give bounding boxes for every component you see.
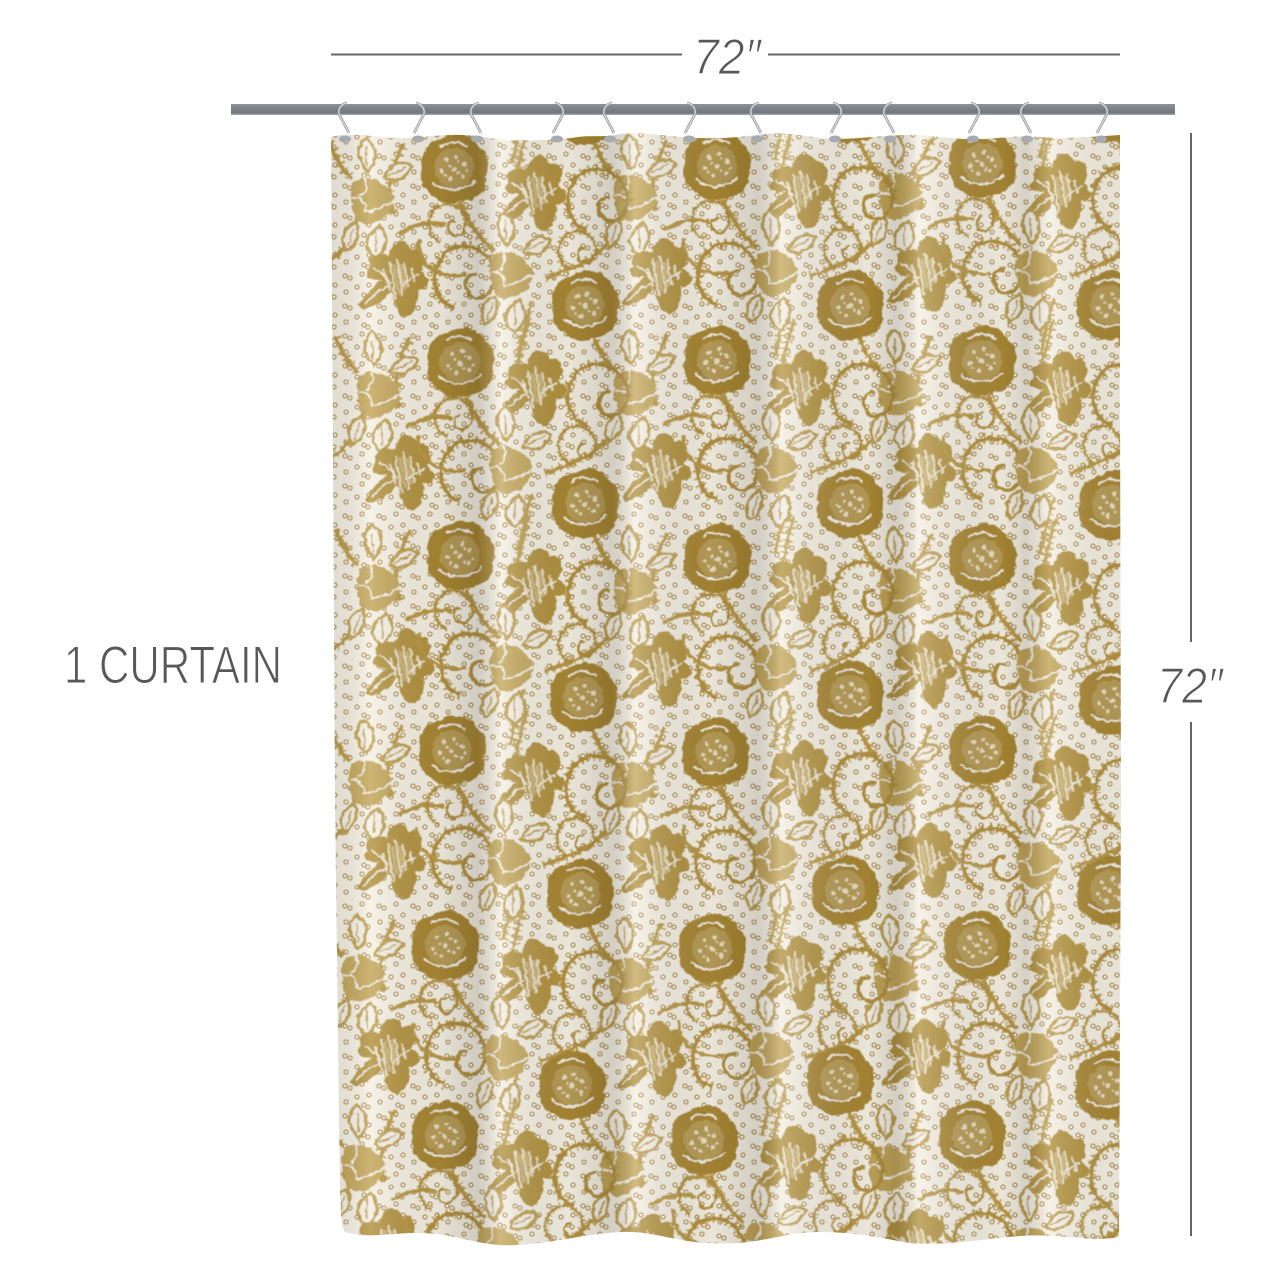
dimension: right height 72 inches: 72″ — [1157, 658, 1225, 714]
curtain with floral print — [331, 102, 1121, 1246]
fabric folds shading — [325, 125, 1125, 1250]
shower rod — [231, 104, 1175, 115]
label: 1 curtain: 1 CURTAIN — [64, 636, 282, 695]
dimension: top width 72 inches: 72″ — [693, 29, 763, 85]
shower curtain hooks — [339, 103, 1107, 142]
